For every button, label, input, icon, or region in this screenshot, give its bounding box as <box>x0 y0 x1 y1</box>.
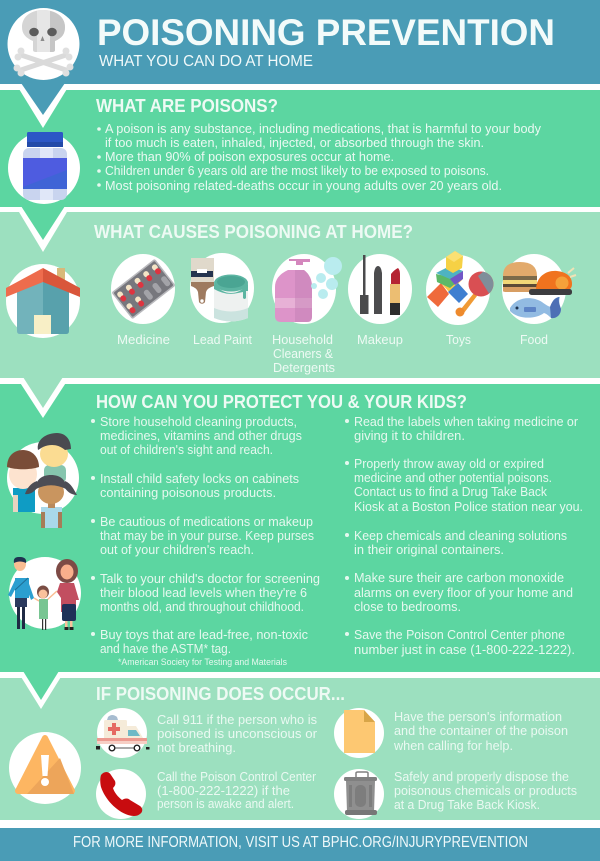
text: call 911 <box>157 713 317 755</box>
text: poison control: Call the Poison Control Center <box>157 770 316 784</box>
text: information: and the container of the poison <box>394 724 568 738</box>
title: POISONING PREVENTION <box>97 12 555 53</box>
right column tips: Keep chemicals and cleaning solutions <box>354 529 567 543</box>
item: food <box>502 254 576 347</box>
text: information: when calling for help. <box>393 739 513 753</box>
icon: warning triangle <box>9 732 81 804</box>
bullet list: A poison is any substance, including medications, that is harmful to your body <box>105 122 542 136</box>
icon: children <box>7 433 79 528</box>
item: makeup <box>348 254 412 347</box>
item: household cleaners <box>272 254 342 375</box>
item: lead paint <box>190 253 254 347</box>
icon: ambulance <box>96 708 150 758</box>
left column tips: Store household cleaning products, <box>100 415 297 429</box>
bullet list: Children under 6 years old are the most likely to be exposed to poisons. <box>105 164 489 178</box>
heading: WHAT ARE POISONS? <box>96 95 278 116</box>
heading: HOW CAN YOU PROTECT YOU & YOUR KIDS? <box>96 391 467 412</box>
label: Toys <box>446 333 471 347</box>
icon: trash can <box>334 769 384 819</box>
panel: header <box>0 0 600 84</box>
panel: how can you protect <box>0 384 600 672</box>
right column tips: alarms on every floor of your home and <box>354 586 573 600</box>
label: Food <box>520 333 548 347</box>
item: toys <box>426 251 494 347</box>
item: medicine <box>111 254 176 347</box>
left column tips <box>91 415 320 667</box>
panel: what are poisons <box>0 90 600 207</box>
label: Makeup <box>357 333 403 347</box>
footnote: *American Society for Testing and Materials <box>118 657 288 667</box>
text: poison control: person is awake and alert. <box>157 797 294 811</box>
bullet list: Most poisoning related-deaths occur in young adults over 20 years old. <box>105 179 502 193</box>
text: poison control: (1-800-222-1222) if the <box>157 784 290 798</box>
icon: family <box>8 557 81 630</box>
arrow: section one to section two <box>16 206 70 252</box>
text: call 911: Call 911 if the person who is <box>157 713 317 727</box>
heading: WHAT CAUSES POISONING AT HOME? <box>94 221 413 242</box>
left column tips: Buy toys that are lead-free, non-toxic <box>100 628 308 642</box>
icon: document <box>334 708 384 758</box>
bullet list: More than 90% of poison exposures occur at home. <box>105 150 394 164</box>
bullet list <box>97 122 542 193</box>
left column tips: that may be in your purse. Keep purses <box>100 529 314 543</box>
right column tips: Properly throw away old or expired <box>354 457 544 471</box>
label: Medicine <box>117 333 170 347</box>
right column tips: giving it to children. <box>354 429 465 443</box>
left column tips: their blood lead levels when they're 6 <box>100 586 307 600</box>
text: call 911: poisoned is unconscious or <box>157 727 317 741</box>
left column tips: out of children's sight and reach. <box>100 443 273 457</box>
panel: if poisoning does occur <box>0 678 600 820</box>
text: disposal <box>394 770 577 812</box>
label: Household <box>272 333 333 347</box>
label: Lead Paint <box>193 333 252 347</box>
icon: house <box>6 264 80 338</box>
right column tips: close to bedrooms. <box>354 600 461 614</box>
left column tips: Be cautious of medications or makeup <box>100 515 313 529</box>
text: information <box>393 710 568 753</box>
text: call 911: not breathing. <box>157 741 236 755</box>
footer: FOR MORE INFORMATION, VISIT US AT BPHC.ORG/INJURYPREVENTION <box>73 834 528 851</box>
right column tips <box>345 415 583 657</box>
arrow: header to section one <box>16 83 70 128</box>
icon: skull and crossbones <box>8 8 80 80</box>
bullet list: if too much is eaten, inhaled, injected, or absorbed through the skin. <box>105 136 484 150</box>
right column tips: Make sure their are carbon monoxide <box>354 571 564 585</box>
heading: IF POISONING DOES OCCUR... <box>96 683 345 704</box>
left column tips: Talk to your child's doctor for screening <box>100 572 320 586</box>
right column tips: Contact us to find a Drug Take Back <box>354 485 548 499</box>
item: household cleaners: Cleaners & <box>273 347 334 361</box>
icon: medicine bottle <box>8 132 80 204</box>
panel: what causes poisoning <box>0 212 600 378</box>
right column tips: in their original containers. <box>354 543 504 557</box>
subtitle: WHAT YOU CAN DO AT HOME <box>99 53 313 70</box>
text: poison control <box>157 770 316 811</box>
arrow: section two to section three <box>17 377 69 418</box>
right column tips: Kiosk at a Boston Police station near you. <box>354 500 583 514</box>
text: disposal: Safely and properly dispose the <box>394 770 569 784</box>
left column tips: months old, and throughout childhood. <box>100 600 304 614</box>
item: household cleaners: Detergents <box>273 361 335 375</box>
icon: telephone <box>96 769 146 819</box>
left column tips: containing poisonous products. <box>100 486 276 500</box>
right column tips: medicine and other potential poisons. <box>354 471 552 485</box>
right column tips: Save the Poison Control Center phone <box>354 628 565 642</box>
left column tips: out of your children's reach. <box>100 543 254 557</box>
text: information: Have the person's information <box>394 710 562 724</box>
right column tips: number just in case (1-800-222-1222). <box>354 643 575 657</box>
text: disposal: at a Drug Take Back Kiosk. <box>394 798 540 812</box>
left column tips: medicines, vitamins and other drugs <box>100 429 302 443</box>
left column tips: Install child safety locks on cabinets <box>100 472 299 486</box>
text: disposal: poisonous chemicals or products <box>394 784 577 798</box>
footer <box>0 828 600 861</box>
left column tips: and have the ASTM* tag. <box>100 642 231 656</box>
right column tips: Read the labels when taking medicine or <box>354 415 578 429</box>
arrow: section three to section four <box>18 671 64 709</box>
